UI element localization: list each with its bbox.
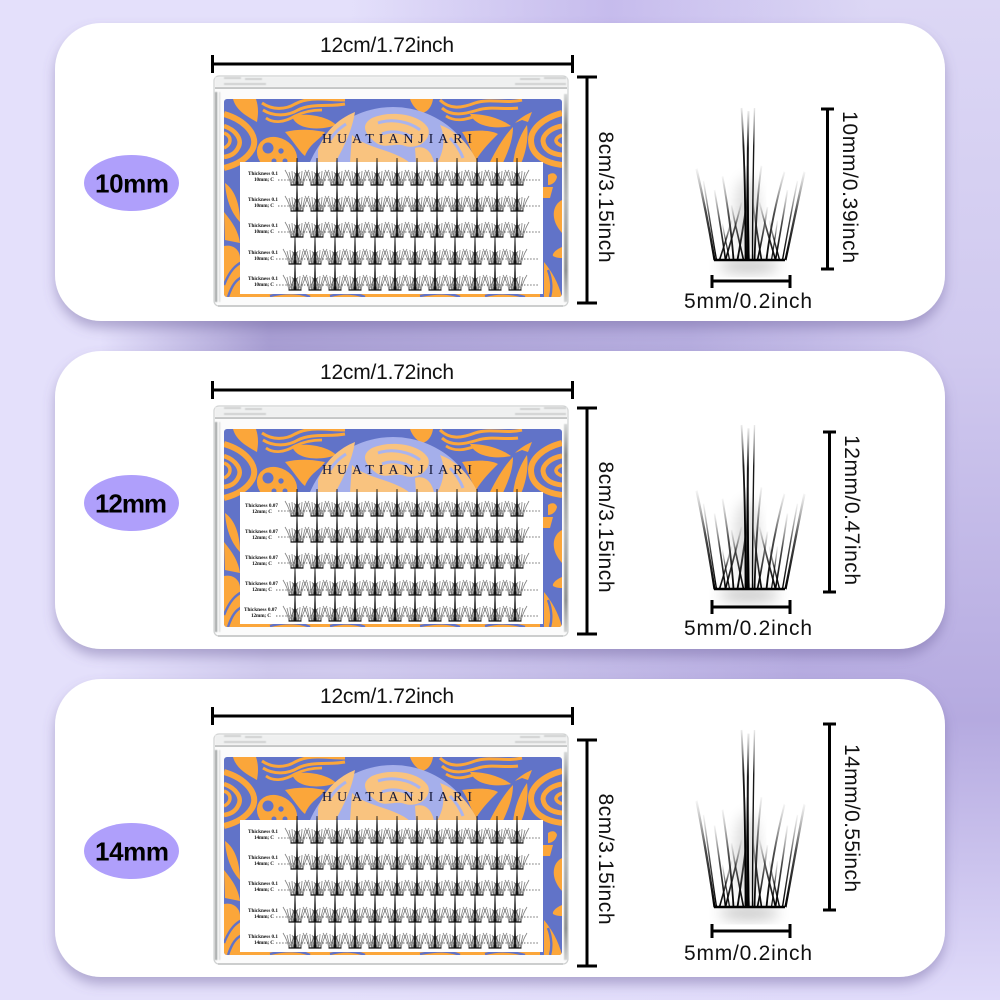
product tray: Thickness 0.1: [248, 881, 278, 887]
product tray: 10mm; C: [254, 203, 274, 209]
panel card: [55, 351, 945, 649]
lash length dimension: [821, 109, 861, 269]
product tray: Thickness 0.07: [244, 607, 277, 613]
product tray: 12mm; C: [252, 509, 272, 515]
product tray: Thickness 0.1: [248, 934, 278, 940]
lash close-up: [696, 425, 804, 602]
product tray: Thickness 0.07: [245, 581, 278, 587]
product tray: 12mm; C: [252, 535, 272, 541]
product tray: Thickness 0.1: [248, 276, 278, 282]
product tray: 12mm; C: [252, 587, 272, 593]
panel: 12mm: [55, 351, 945, 649]
lash length dimension: [823, 724, 863, 910]
product tray: 14mm; C: [254, 887, 274, 893]
height dimension: [577, 740, 617, 966]
lash base dimension: [684, 924, 812, 965]
lash length dimension: 12mm/0.47inch: [840, 435, 863, 585]
width dimension: 12cm/1.72inch: [320, 34, 454, 57]
lash base dimension: 5mm/0.2inch: [684, 617, 812, 640]
width dimension: [212, 685, 572, 725]
lash base dimension: 5mm/0.2inch: [684, 290, 812, 313]
panel card: [55, 679, 945, 977]
product tray: 14mm; C: [254, 835, 274, 841]
product tray: 10mm; C: [254, 177, 274, 183]
lash base dimension: [684, 600, 812, 640]
product tray: Thickness 0.07: [245, 529, 278, 535]
product tray: 14mm; C: [254, 861, 274, 867]
product tray: [214, 76, 568, 306]
product tray: Thickness 0.1: [248, 223, 278, 229]
product tray: HUATIANJIARI: [322, 790, 472, 805]
product tray: 14mm; C: [254, 914, 274, 920]
height dimension: [577, 408, 617, 634]
panel: 14mm: [55, 679, 945, 977]
product tray: 12mm; C: [252, 561, 272, 567]
size badge: 14mm: [95, 836, 169, 866]
width dimension: [212, 361, 572, 399]
size badge: 10mm: [95, 168, 169, 198]
product tray: 10mm; C: [254, 256, 274, 262]
lash close-up: [696, 730, 804, 920]
lash length dimension: 14mm/0.55inch: [840, 744, 863, 892]
width dimension: 12cm/1.72inch: [320, 685, 454, 708]
height dimension: 8cm/3.15inch: [594, 132, 617, 262]
product tray: 10mm; C: [254, 282, 274, 288]
product tray: [214, 734, 568, 964]
product tray: 14mm; C: [254, 940, 274, 946]
lash close-up: [696, 108, 804, 273]
product tray: Thickness 0.1: [248, 855, 278, 861]
product tray: 12mm; C: [251, 613, 271, 619]
size badge: [84, 823, 179, 879]
panel card: [55, 23, 945, 321]
height dimension: 8cm/3.15inch: [594, 794, 617, 924]
product tray: [214, 406, 568, 636]
lash length dimension: 10mm/0.39inch: [838, 111, 861, 263]
product tray: HUATIANJIARI: [322, 132, 472, 147]
size badge: 12mm: [95, 488, 167, 518]
panel: 10mm: [55, 23, 945, 321]
lash length dimension: [823, 432, 863, 592]
product tray: Thickness 0.07: [245, 555, 278, 561]
height dimension: 8cm/3.15inch: [594, 462, 617, 592]
product tray: Thickness 0.1: [248, 908, 278, 914]
product tray: Thickness 0.1: [248, 250, 278, 256]
width dimension: 12cm/1.72inch: [320, 361, 454, 384]
product tray: Thickness 0.07: [245, 503, 278, 509]
product tray: Thickness 0.1: [248, 829, 278, 835]
height dimension: [577, 77, 617, 303]
size badge: [84, 155, 179, 211]
product tray: Thickness 0.1: [248, 197, 278, 203]
product tray: 10mm; C: [254, 229, 274, 235]
lash base dimension: [684, 275, 812, 313]
product tray: HUATIANJIARI: [322, 463, 472, 478]
product tray: Thickness 0.1: [248, 171, 278, 177]
size badge: [84, 475, 179, 531]
width dimension: [212, 34, 572, 73]
lash base dimension: 5mm/0.2inch: [684, 942, 812, 965]
